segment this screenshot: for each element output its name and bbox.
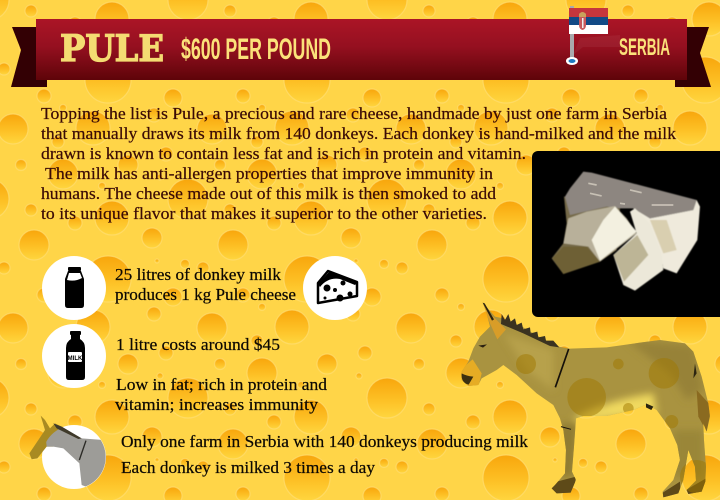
icon: milk bottle xyxy=(42,256,106,320)
icon: donkey in circle xyxy=(29,416,110,489)
fact: milk to cheese ratio: 25 litres of donkey milk xyxy=(115,265,282,284)
mane xyxy=(501,314,559,347)
fact: nutrition xyxy=(115,375,328,414)
intro paragraph: Topping the list is Pule, a precious and rare cheese, handmade by just one farm in Serbia xyxy=(41,104,667,123)
fact: price per litre: 1 litre costs around $45 xyxy=(116,335,280,354)
icon: cheese wedge xyxy=(303,256,367,320)
ribbon banner xyxy=(11,19,711,87)
price heading: $600 PER POUND xyxy=(181,33,331,66)
banner bar xyxy=(36,19,687,80)
ribbon tail right xyxy=(675,27,711,87)
illustration: donkey xyxy=(462,302,710,498)
icon: Serbian flag pin xyxy=(566,6,620,65)
intro paragraph: The milk has anti-allergen properties that improve immunity in xyxy=(45,164,494,183)
icon: milk bottle with label xyxy=(42,324,106,388)
intro paragraph: humans. The cheese made out of this milk is then smoked to add xyxy=(41,184,497,203)
fact: milk to cheese ratio: produces 1 kg Pule cheese xyxy=(115,285,296,304)
country label: SERBIA xyxy=(619,34,670,61)
intro paragraph: that manually draws its milk from 140 donkeys. Each donkey is hand-milked and the milk xyxy=(41,124,677,143)
ribbon tail left xyxy=(11,27,47,87)
icon: milk bottle with label: MILK xyxy=(68,356,83,362)
fact: farm and milking: Each donkey is milked 3 times a day xyxy=(121,458,376,477)
intro paragraph: drawn is known to contain less fat and is rich in protein and vitamin. xyxy=(41,144,526,163)
intro paragraph xyxy=(41,104,677,223)
intro paragraph: to its unique flavor that makes it superior to the other varieties. xyxy=(41,204,487,223)
fact: nutrition: vitamin; increases immunity xyxy=(115,395,319,414)
fact: milk to cheese ratio xyxy=(115,265,296,304)
fact: farm and milking: Only one farm in Serbia with 140 donkeys producing milk xyxy=(121,432,529,451)
photo: Pule cheese on black xyxy=(532,151,720,317)
fact: farm and milking xyxy=(121,432,529,477)
fact: nutrition: Low in fat; rich in protein and xyxy=(116,375,328,394)
title: PULE xyxy=(60,28,164,70)
